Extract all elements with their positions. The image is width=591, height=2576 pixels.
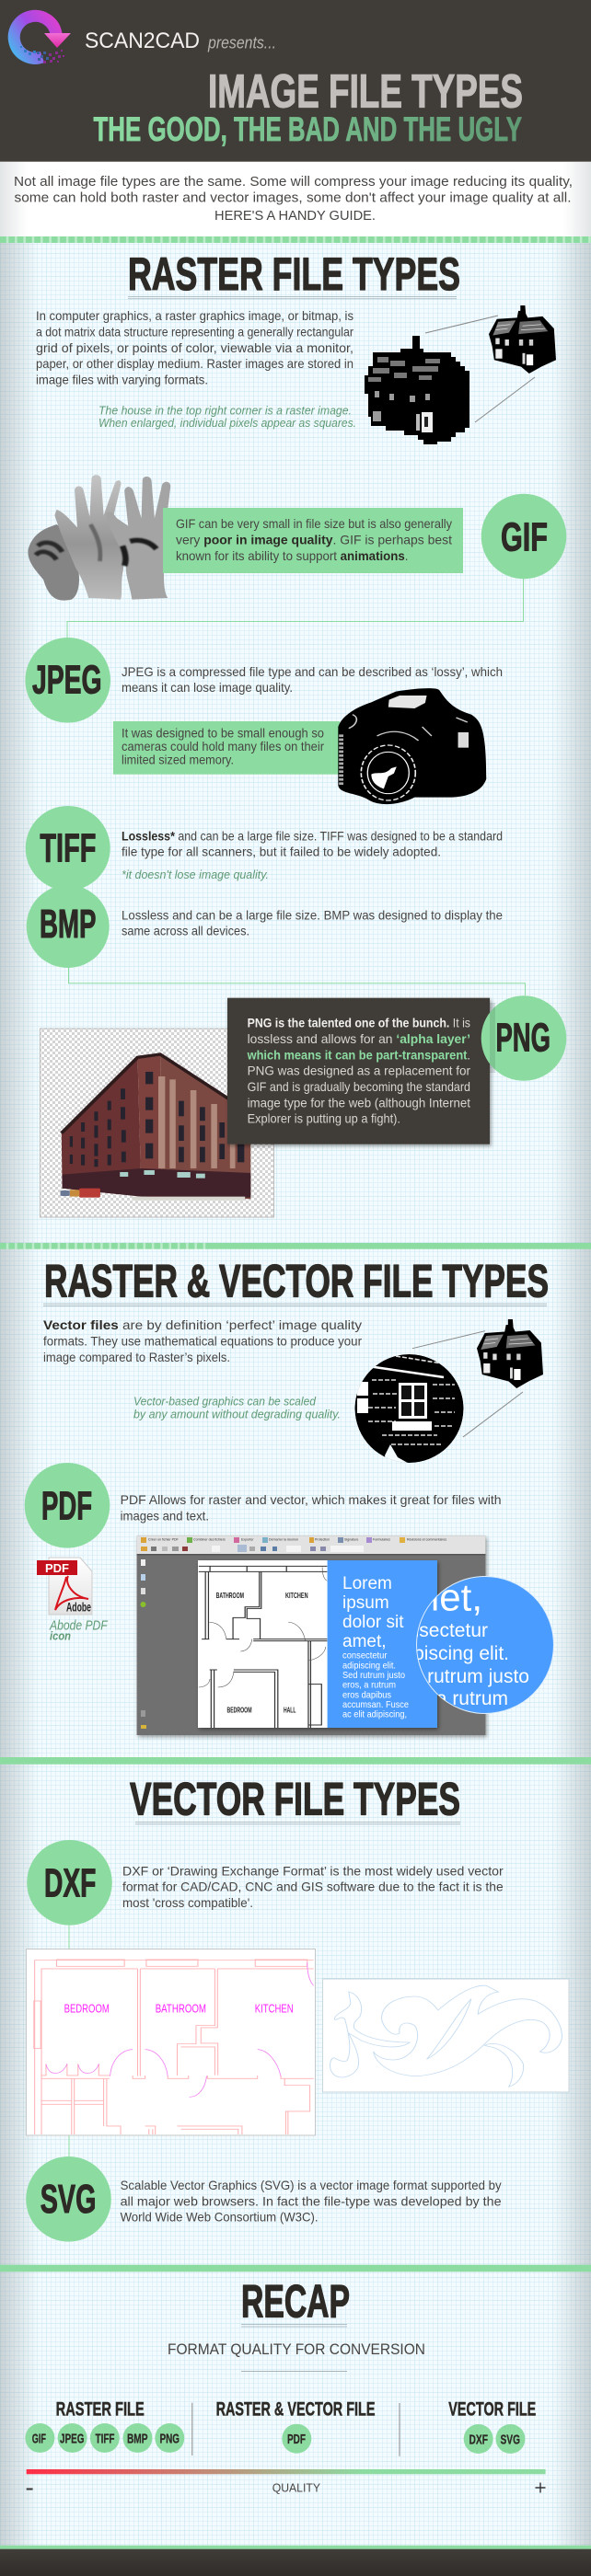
caption: raster house: The house in the top right corner is a raster image. [98,404,352,418]
text block: DXF: DXF or ‘Drawing Exchange Format’ is the most widely used vector [122,1863,504,1878]
blue text panel: eros dapibus [342,1689,391,1700]
heading: recap: RECAP [241,2275,350,2327]
blue text panel: dolor sit [342,1613,404,1632]
CAD room labels [64,2001,294,2015]
magnifier circle [416,1576,554,1714]
blue text panel: ac elit adipiscing, [342,1709,407,1720]
text block: SVG [121,2178,502,2225]
blue text panel: Lorem [342,1574,392,1593]
blue text panel: ipsum [342,1593,389,1613]
badge: JPEG [25,638,110,723]
panel: raster file recap: GIF [32,2432,46,2447]
PNG text [247,1016,470,1126]
toolbar: Créer un fichier PDF [148,1538,180,1542]
text block: PDF [121,1492,502,1523]
icon: Adobe PDF file: Adobe [66,1600,91,1615]
document page [198,1560,437,1728]
footer band [0,2546,591,2576]
caption: PDF icon: icon [50,1629,71,1643]
CAD room labels: BEDROOM [64,2001,110,2015]
CAD room labels: BATHROOM [156,2001,206,2015]
PNG text: Explorer is putting up a fight). [248,1111,400,1126]
icon: Adobe PDF file [37,1558,92,1615]
scale maximum [536,2482,545,2493]
badge: TIFF [26,806,110,891]
blue text panel: adipiscing elit. [342,1660,396,1671]
PNG text: PNG was designed as a replacement for [248,1064,470,1078]
text block: TIFF: Lossless* and can be a large file size. TIFF was designed to be a standard [122,828,503,843]
badge: PNG: PNG [495,1016,550,1061]
toolbar: Combiner des fichiers [193,1538,226,1542]
text block: raster definition: grid of pixels, or points of color, viewable via a monitor, [36,340,353,355]
sidebar icons [140,1559,146,1729]
presents tagline: presents... [207,33,276,52]
panel: raster and vector file recap: RASTER & VECTOR FILE [216,2399,376,2421]
arrow: GIF to JPEG connector [67,579,523,638]
floor plan: KITCHEN [285,1591,308,1600]
magnifier circle: Sed rutrum justo [388,1666,529,1687]
icon: enlarged vector house detail [355,1354,464,1466]
icon: enlarged pixelated house [365,336,469,444]
badge: PNG [481,995,566,1081]
caption: vector scaling: by any amount without degrading quality. [133,1408,341,1421]
text block: vector files: formats. They use mathematical equations to produce your [43,1333,362,1348]
text block: TIFF: *it doesn't lose image quality. [122,868,269,881]
heading: vector file types: VECTOR FILE TYPES [130,1774,460,1825]
toolbar: Signature [344,1538,358,1542]
CAD room labels: KITCHEN [255,2001,294,2015]
caption: vector scaling: Vector-based graphics can be scaled [133,1395,317,1409]
text block: PDF: PDF Allows for raster and vector, which makes it great for files with [121,1492,502,1507]
subheading: format quality: FORMAT QUALITY FOR CONVERSION [168,2341,425,2358]
GIF text [176,516,452,563]
blue text panel: accumsan. Fusce [342,1699,409,1710]
panel: GIF description [163,508,463,573]
PNG text: GIF and is gradually becoming the standard [248,1079,470,1094]
text block: vector files: image compared to Raster’s pixels. [43,1350,230,1364]
panel: vector file recap: SVG [501,2432,520,2447]
caption: vector scaling [133,1395,341,1421]
panel: raster file recap: BMP [127,2432,147,2447]
panel: raster file recap: TIFF [96,2432,114,2447]
panel: JPEG cameras note: It was designed to be small enough so [122,726,324,741]
badge: DXF: DXF [44,1860,96,1905]
blue text panel: amet, [342,1632,387,1651]
text block: DXF [122,1863,504,1910]
floor plan: HALL [284,1706,296,1715]
screenshot: PDF reader [137,1535,554,1735]
intro text: some can hold both raster and vector images, some don't affect your image quality at all. [15,190,571,206]
icon: Adobe PDF file: PDF [45,1561,69,1575]
text block: raster definition [36,308,353,386]
panel: raster file recap: RASTER FILE [56,2399,145,2421]
panel: raster file recap [25,2399,184,2453]
caption: PDF icon: Abode PDF [49,1618,108,1634]
badge: PDF: PDF [41,1484,92,1529]
text block: vector files: Vector files are by definition ‘perfect’ image quality [43,1317,362,1332]
image: vector ornament [322,1979,569,2092]
floor plan: BATHROOM [216,1591,244,1600]
text block: DXF: most 'cross compatible'. [122,1895,253,1910]
toolbar: Exporter [241,1538,254,1542]
text block: SVG: all major web browsers. In fact the file-type was developed by the [121,2193,502,2208]
panel: intro [0,162,591,236]
text block: JPEG: JPEG is a compressed file type and can be described as ‘lossy’, which [122,664,503,679]
magnifier circle: amet, [386,1576,482,1619]
text block: PDF: images and text. [121,1508,209,1523]
panel: PNG description [227,998,490,1144]
image: CAD floor plan [26,1949,315,2135]
badge: SVG: SVG [41,2177,96,2222]
GIF text: GIF can be very small in file size but is also generally [176,516,452,531]
GIF text: known for its ability to support animations. [176,548,409,563]
image: transparent building [41,1029,274,1217]
panel: vector file recap [448,2399,536,2454]
toolbar [141,1537,446,1552]
magnifier circle: adipiscing elit. [388,1643,509,1664]
panel: JPEG cameras note: limited sized memory. [122,753,234,767]
toolbar: Révisions et commentaires [407,1538,446,1542]
icon: small vector house [477,1319,543,1388]
text block: BMP [122,907,503,938]
text block: raster definition: a dot matrix data structure representing a generally rectangular [36,324,353,339]
panel: vector file recap: DXF [469,2432,488,2447]
intro text [14,174,573,224]
PNG text: PNG is the talented one of the bunch. It is [248,1016,470,1030]
icon: Scan2CAD logo [14,16,71,63]
text block: SVG: World Wide Web Consortium (W3C). [121,2210,319,2225]
text block: vector files [43,1317,362,1364]
blue text panel [328,1560,437,1728]
floor plan: BEDROOM [226,1706,252,1715]
magnifier circle: consectetur [388,1620,488,1641]
heading: raster file types: RASTER FILE TYPES [128,248,460,300]
text block: BMP: same across all devices. [122,924,249,938]
header banner [0,0,591,162]
blue text panel: eros, a rutrum [342,1680,396,1691]
PNG text: lossless and allows for an ‘alpha layer’ [248,1031,470,1046]
badge: PDF [25,1463,110,1548]
badge: DXF [27,1840,112,1926]
blue text panel: consectetur [342,1650,388,1662]
text block: TIFF [122,828,503,881]
panel: JPEG cameras note [113,721,340,775]
intro text: Not all image file types are the same. Some will compress your image reducing its quality, [14,174,573,190]
text block: DXF: format for CAD/CAD, CNC and GIS software due to the fact it is the [122,1880,504,1894]
text block: TIFF: file type for all scanners, but it failed to be widely adopted. [122,845,441,859]
badge: BMP: BMP [40,902,96,947]
panel: raster and vector file recap [216,2399,376,2454]
brand name: SCAN2CAD [85,29,200,53]
toolbar: Démarrer la réunion [269,1538,298,1542]
toolbar: Formulaires [373,1538,390,1542]
blue text panel: Sed rutrum justo [342,1670,405,1681]
badge: BMP [27,885,110,968]
panel: raster file recap: JPEG [60,2432,85,2447]
badge: GIF [481,494,566,579]
text block: BMP: Lossless and can be a large file size. BMP was designed to display the [122,907,503,922]
caption: raster house: When enlarged, individual pixels appear as squares. [98,416,356,430]
chart: quality scale [27,2469,546,2494]
panel: raster file recap: PNG [160,2432,180,2447]
text block: raster definition: image files with varying formats. [36,372,208,386]
caption: raster house [98,404,356,430]
magnifier circle: eros, a rutrum [388,1688,508,1709]
badge: GIF: GIF [501,515,548,560]
text block: raster definition: In computer graphics, a raster graphics image, or bitmap, is [36,308,353,323]
GIF text: very poor in image quality. GIF is perhaps best [176,532,452,546]
text block: SVG: Scalable Vector Graphics (SVG) is a vector image format supported by [121,2178,502,2192]
toolbar: Protection [315,1538,330,1542]
PNG text: which means it can be part-transparent. [247,1047,470,1062]
intro text: HERE'S A HANDY GUIDE. [214,208,376,224]
arrow: DXF to SVG connector [68,1926,70,2156]
badge: JPEG: JPEG [32,657,102,702]
panel: raster and vector file recap: PDF [287,2432,306,2447]
icon: small raster house [489,305,556,374]
panel: JPEG cameras note: cameras could hold many files on their [122,739,324,753]
caption: PDF icon [49,1618,108,1643]
icon: camera [338,688,486,804]
PNG text: image type for the web (although Internet [248,1095,470,1110]
badge: TIFF: TIFF [40,826,96,871]
text block: JPEG [122,664,503,695]
panel: vector file recap: VECTOR FILE [448,2399,536,2421]
scale label: QUALITY [272,2480,320,2494]
arrow: BMP to PNG connector [68,967,525,995]
badge: SVG [26,2156,111,2242]
text block: JPEG: means it can lose image quality. [122,680,293,695]
scale minimum [27,2488,33,2490]
heading: recap [241,2275,350,2327]
floor plan [199,1566,327,1728]
text block: raster definition: paper, or other display medium. Raster images are stored in [36,356,353,371]
icon: hands showing GIF [28,475,170,601]
